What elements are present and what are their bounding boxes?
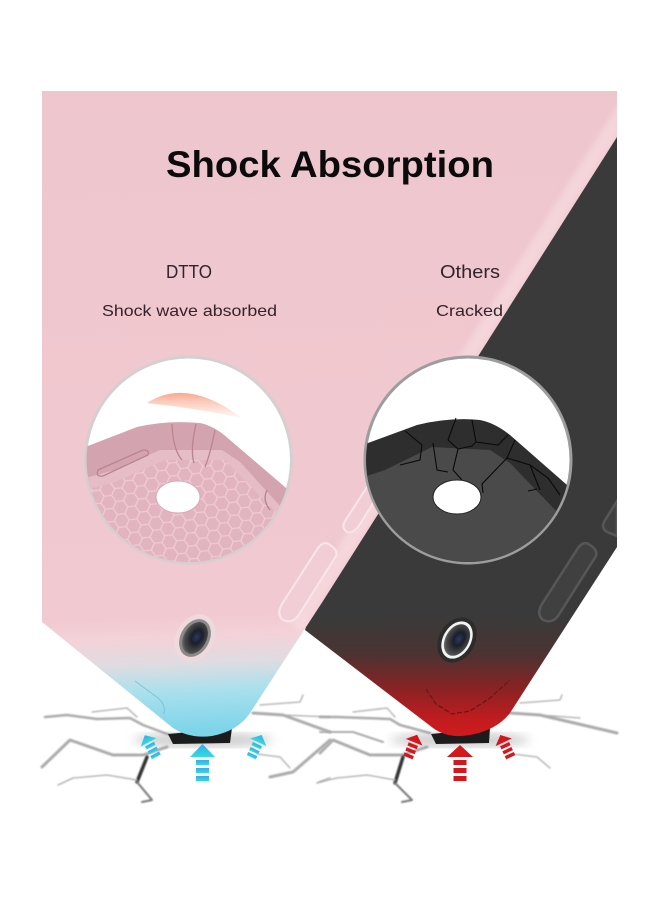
black tablet volume buttons xyxy=(539,501,617,621)
left arrow xyxy=(137,731,164,761)
side buttons and ribs xyxy=(97,424,270,510)
honeycomb floor xyxy=(90,460,276,562)
pink tablet edge highlight xyxy=(294,108,617,627)
case floor xyxy=(367,447,556,562)
inner lip xyxy=(88,450,280,512)
left arrow xyxy=(400,731,425,761)
camera hole xyxy=(433,480,481,514)
ground cracks: right xyxy=(320,695,617,802)
shock wave glow xyxy=(147,393,242,418)
arrows: shock transmitted (red) xyxy=(400,731,519,781)
centre arrow xyxy=(190,744,215,781)
label: DTTO: DTTO xyxy=(166,262,212,282)
impact shadow: right xyxy=(390,728,530,747)
label: Shock wave absorbed: Shock wave absorbed xyxy=(102,303,277,320)
right arrow xyxy=(243,731,270,761)
pink tablet volume buttons xyxy=(279,487,379,621)
ground cracks: left xyxy=(42,695,330,802)
impact shadow: left xyxy=(133,728,273,747)
magnifier: DTTO honeycomb interior xyxy=(80,357,292,570)
magnifier: others cracked interior xyxy=(360,357,575,570)
case rim xyxy=(86,422,286,512)
case body xyxy=(366,419,567,562)
title: Shock Absorption xyxy=(166,144,494,185)
crack lines xyxy=(400,418,560,495)
label: Cracked: Cracked xyxy=(436,303,503,320)
pink tablet xyxy=(42,85,640,741)
pink tablet speaker line xyxy=(135,681,164,714)
black tablet camera xyxy=(437,618,477,663)
camera hole xyxy=(156,481,200,513)
pink tablet camera xyxy=(176,614,215,662)
centre arrow xyxy=(447,745,473,781)
right arrow xyxy=(492,731,519,761)
arrows: shock absorbed (blue) xyxy=(137,731,270,781)
crack on black tablet edge xyxy=(426,680,510,714)
label: Others: Others xyxy=(440,262,500,282)
black tablet xyxy=(305,130,617,736)
